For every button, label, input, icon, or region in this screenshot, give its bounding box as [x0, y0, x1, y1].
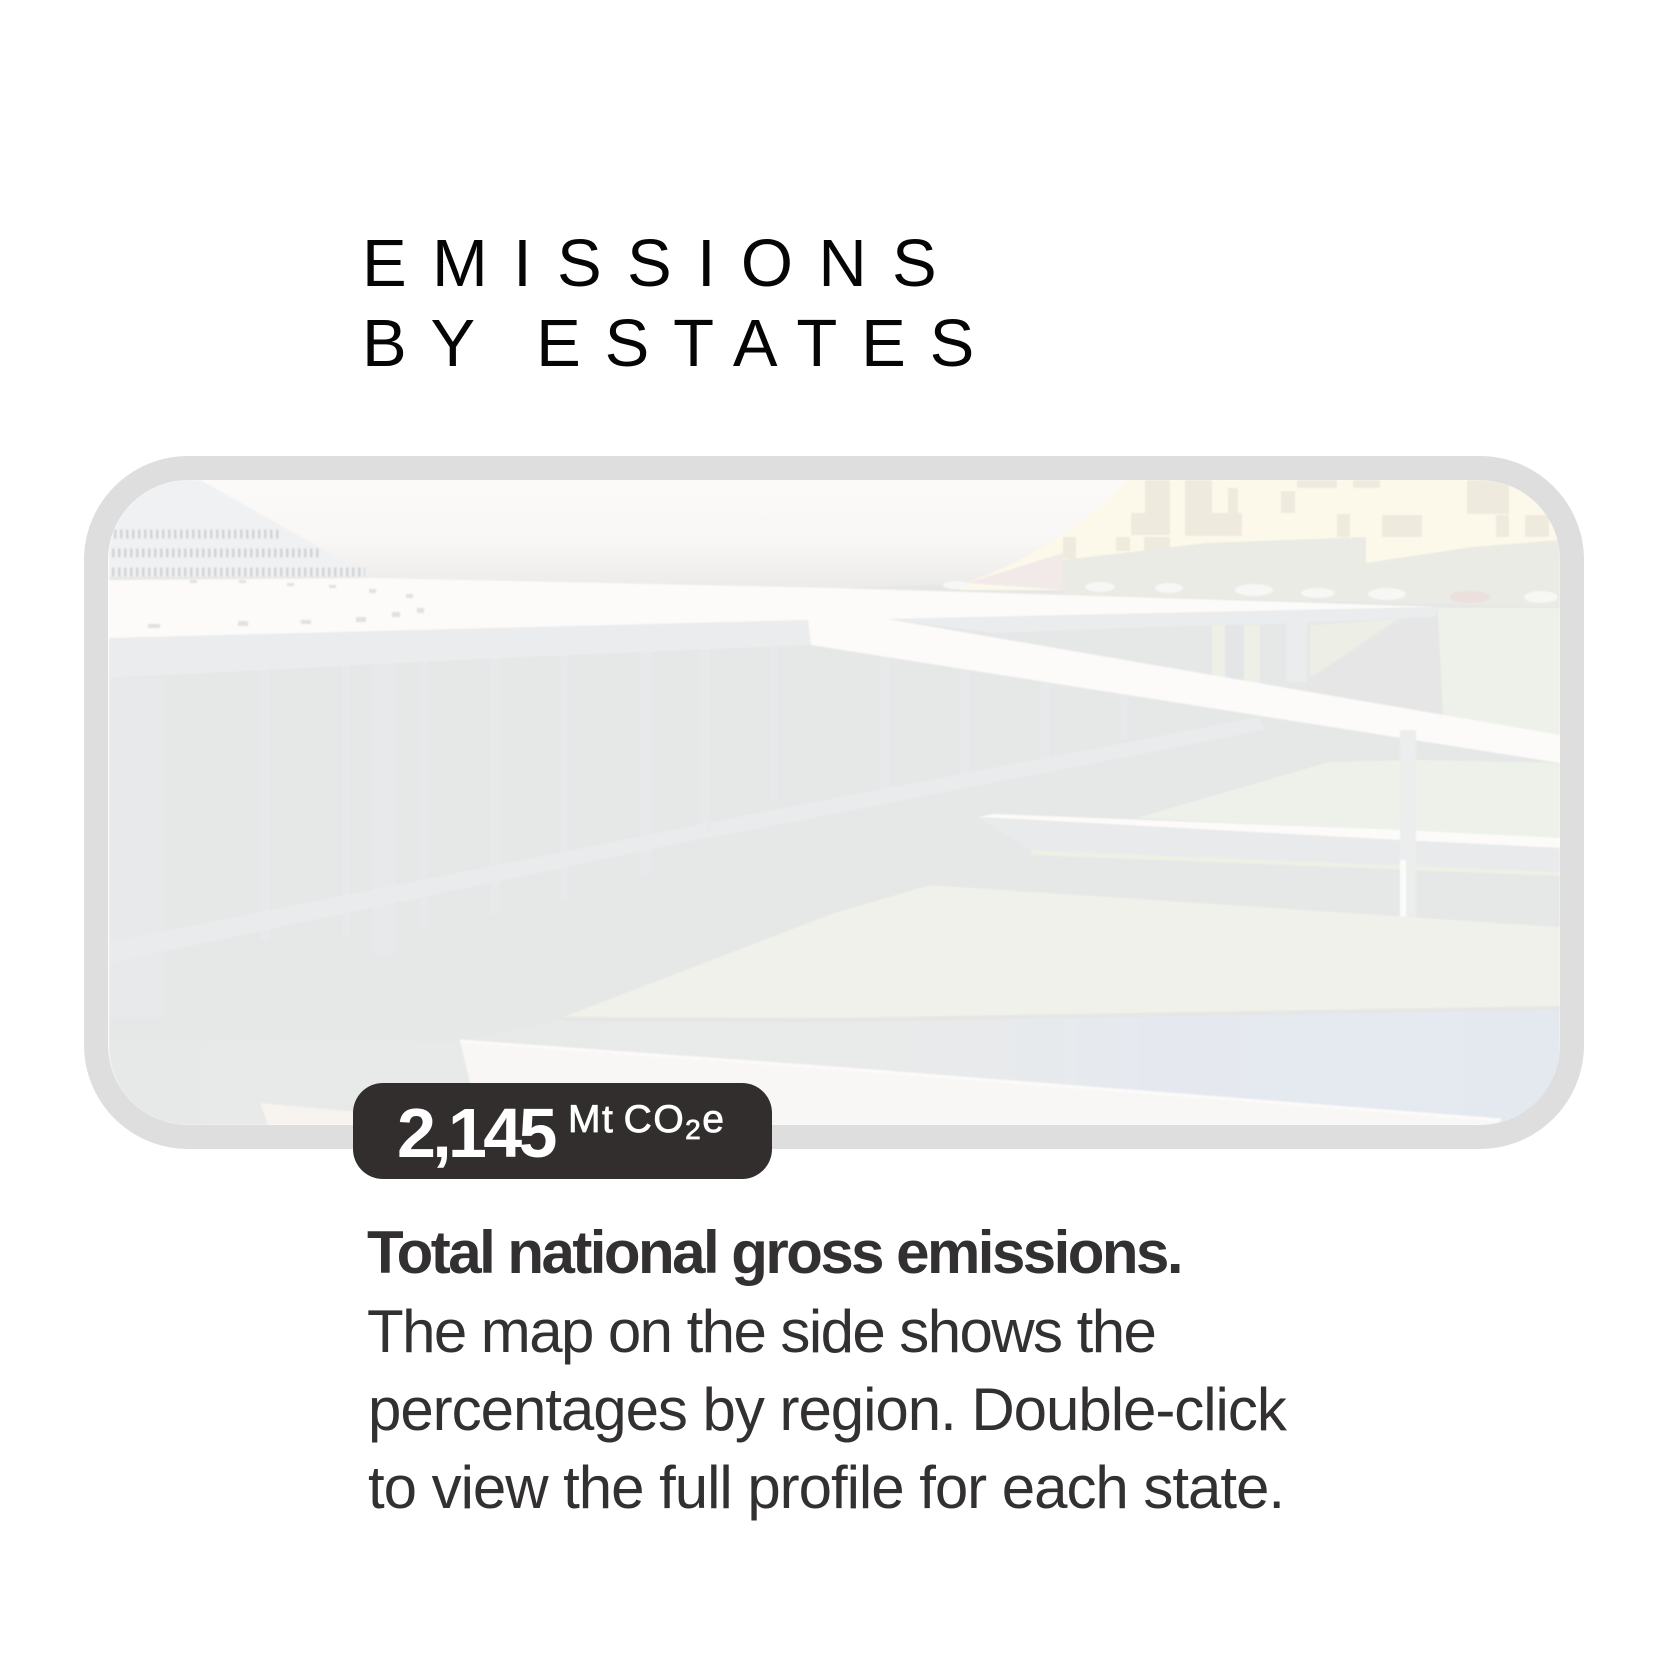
yellow building: [960, 480, 1560, 590]
dome: [200, 480, 1129, 588]
unit: Mt CO2e: [568, 1098, 725, 1145]
line 4: to view the full profile for each state.: [368, 1454, 1284, 1521]
bold lead: Total national gross emissions.: [367, 1219, 1181, 1286]
parked cars: [943, 581, 1558, 603]
text block: description: [367, 1219, 1287, 1521]
title: EMISSIONS: [362, 226, 962, 301]
line 3: percentages by region. Double-click: [368, 1376, 1286, 1443]
diagonal white beam: [808, 619, 1560, 763]
title: BY ESTATES: [362, 306, 998, 381]
left stepped building: [109, 480, 372, 577]
big lawn: [563, 885, 1560, 1020]
image: government building photo: [108, 480, 1560, 1125]
walkway: [978, 814, 1560, 876]
middle lawn: [1137, 760, 1560, 838]
line 2: The map on the side shows the: [367, 1298, 1155, 1365]
trees: [1063, 537, 1560, 607]
frame border: [84, 456, 1584, 1149]
roof slab: [109, 578, 1438, 638]
white wedge: [460, 1041, 1501, 1125]
lower diagonal beams: [109, 717, 1265, 963]
value: 2,145: [397, 1094, 554, 1172]
callout: total value pill: [353, 1083, 772, 1179]
title: [362, 226, 998, 381]
peach strip: [260, 1103, 360, 1125]
upper right lawn: [1212, 608, 1560, 738]
fascia: [109, 608, 1438, 678]
support pole: [1400, 730, 1416, 920]
water: [109, 1008, 1560, 1125]
panel: photo frame: [84, 456, 1584, 1149]
